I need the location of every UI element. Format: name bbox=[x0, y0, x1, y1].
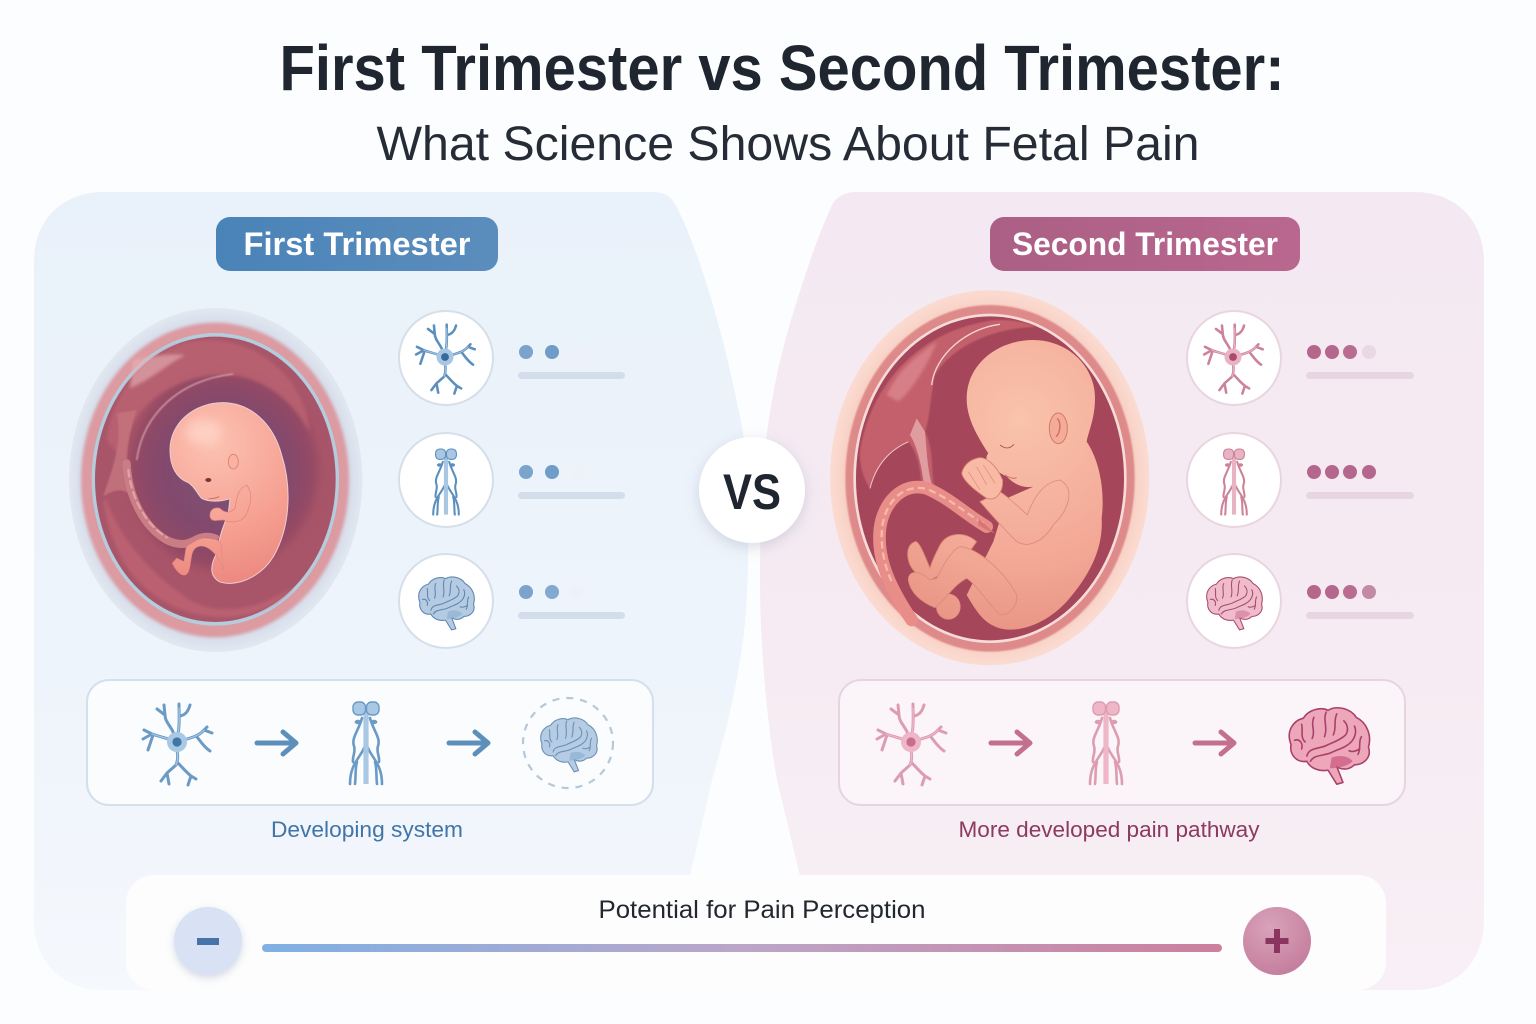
badge: first trimester: First Trimester bbox=[244, 226, 470, 262]
arrow: cord to brain bbox=[1195, 732, 1234, 754]
title: First Trimester vs Second Trimester: bbox=[280, 32, 1284, 104]
panel: first trimester bbox=[34, 192, 748, 990]
scale gradient bar bbox=[262, 944, 1222, 952]
rating rows: second trimester bbox=[1306, 345, 1414, 619]
illustration: first trimester embryo in sac bbox=[69, 308, 362, 652]
icon: spinal cord bbox=[1187, 433, 1281, 527]
icon: brain in dashed circle bbox=[523, 698, 613, 788]
panel: second trimester bbox=[760, 192, 1484, 990]
pathway box: second trimester bbox=[839, 680, 1405, 805]
arrow: neuron to cord bbox=[991, 732, 1030, 754]
caption: second trimester: More developed pain pathway bbox=[958, 817, 1260, 842]
subtitle: What Science Shows About Fetal Pain bbox=[376, 118, 1200, 171]
icon: brain bbox=[399, 554, 493, 648]
icon: spinal cord bbox=[350, 702, 382, 784]
icon: spinal cord bbox=[399, 433, 493, 527]
illustration: second trimester fetus in womb bbox=[830, 290, 1149, 665]
pathway box: first trimester bbox=[87, 680, 653, 805]
plus button bbox=[1243, 907, 1311, 975]
scale label: Potential for Pain Perception bbox=[598, 896, 926, 924]
icon: brain bbox=[1187, 554, 1281, 648]
badge: first trimester bbox=[216, 217, 498, 271]
VS badge: VS bbox=[723, 464, 781, 520]
rating rows: first trimester bbox=[518, 345, 625, 619]
icon: neuron bbox=[1187, 311, 1281, 405]
scale panel: potential for pain perception bbox=[126, 875, 1386, 990]
icon: neuron bbox=[399, 311, 493, 405]
icon group: first trimester maturity icons bbox=[399, 311, 493, 648]
VS badge bbox=[699, 437, 805, 543]
arrow: neuron to cord bbox=[257, 732, 296, 754]
badge: second trimester: Second Trimester bbox=[1012, 226, 1278, 262]
arrow: cord to brain bbox=[449, 732, 488, 754]
minus button bbox=[174, 907, 242, 975]
icon group: second trimester maturity icons bbox=[1187, 311, 1281, 648]
badge: second trimester bbox=[990, 217, 1300, 271]
icon: developed brain bbox=[1289, 708, 1370, 784]
icon: neuron bbox=[877, 704, 946, 785]
icon: neuron bbox=[143, 704, 212, 785]
icon: spinal cord bbox=[1090, 702, 1122, 784]
caption: first trimester: Developing system bbox=[271, 817, 463, 842]
